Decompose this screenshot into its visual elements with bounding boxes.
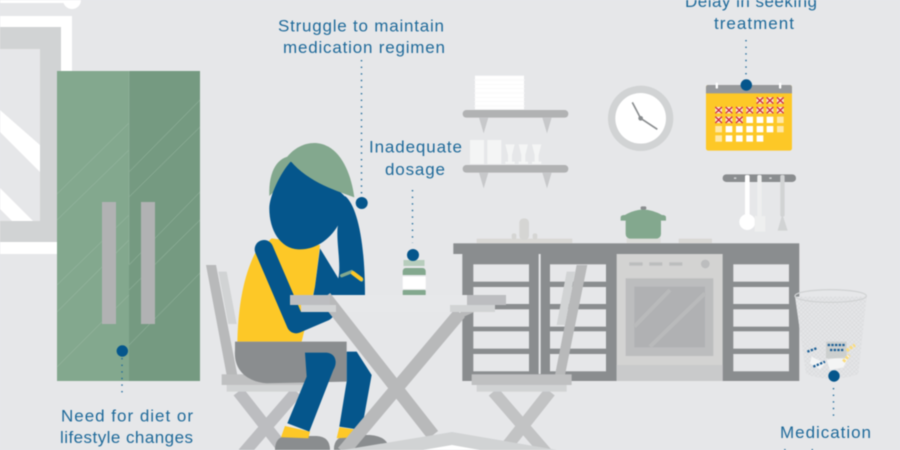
waste basket with discarded medication — [795, 290, 867, 379]
counter items: sink and pot — [477, 206, 712, 243]
label: dosage: dosage — [385, 160, 445, 179]
kitchen cabinets — [453, 243, 799, 381]
far leg and shoe — [334, 352, 390, 450]
torso — [237, 238, 320, 342]
marker: delay in seeking treatment — [741, 40, 752, 91]
label: lifestyle changes line: lifestyle changes — [60, 428, 193, 447]
oven — [617, 254, 723, 381]
utensil rail — [723, 174, 796, 232]
hips — [235, 342, 347, 383]
lower arm — [264, 249, 325, 324]
person sitting at table — [235, 143, 390, 450]
left chair — [206, 265, 310, 450]
label: struggle to maintain: Struggle to maintain — [278, 16, 444, 36]
pill yellow — [353, 273, 361, 279]
raised arm — [313, 196, 365, 295]
label: treatment: treatment — [714, 14, 794, 33]
marker: inadequate dosage — [407, 190, 419, 261]
wall clock — [608, 86, 673, 151]
marker: struggle to maintain regimen — [356, 60, 368, 209]
near leg and shoe — [275, 353, 336, 450]
marker: diet or lifestyle — [117, 345, 128, 396]
right chair — [472, 265, 587, 450]
label: medication: Medication — [780, 423, 871, 442]
marker: medication intake — [828, 370, 840, 416]
window — [0, 0, 81, 254]
refrigerator — [57, 71, 200, 381]
label: need for diet or lifestyle changes: Need for diet or — [61, 406, 193, 426]
calendar — [706, 83, 792, 151]
table — [290, 295, 506, 450]
pills in hand — [342, 272, 362, 280]
front hair — [287, 143, 354, 197]
back hair — [269, 156, 293, 196]
medication jar — [403, 260, 426, 296]
floor rug — [343, 432, 557, 450]
label: medication regimen: medication regimen — [283, 38, 445, 57]
shelves with dishes — [463, 76, 568, 188]
head — [269, 162, 345, 249]
label: inadequate: Inadequate — [369, 138, 462, 156]
